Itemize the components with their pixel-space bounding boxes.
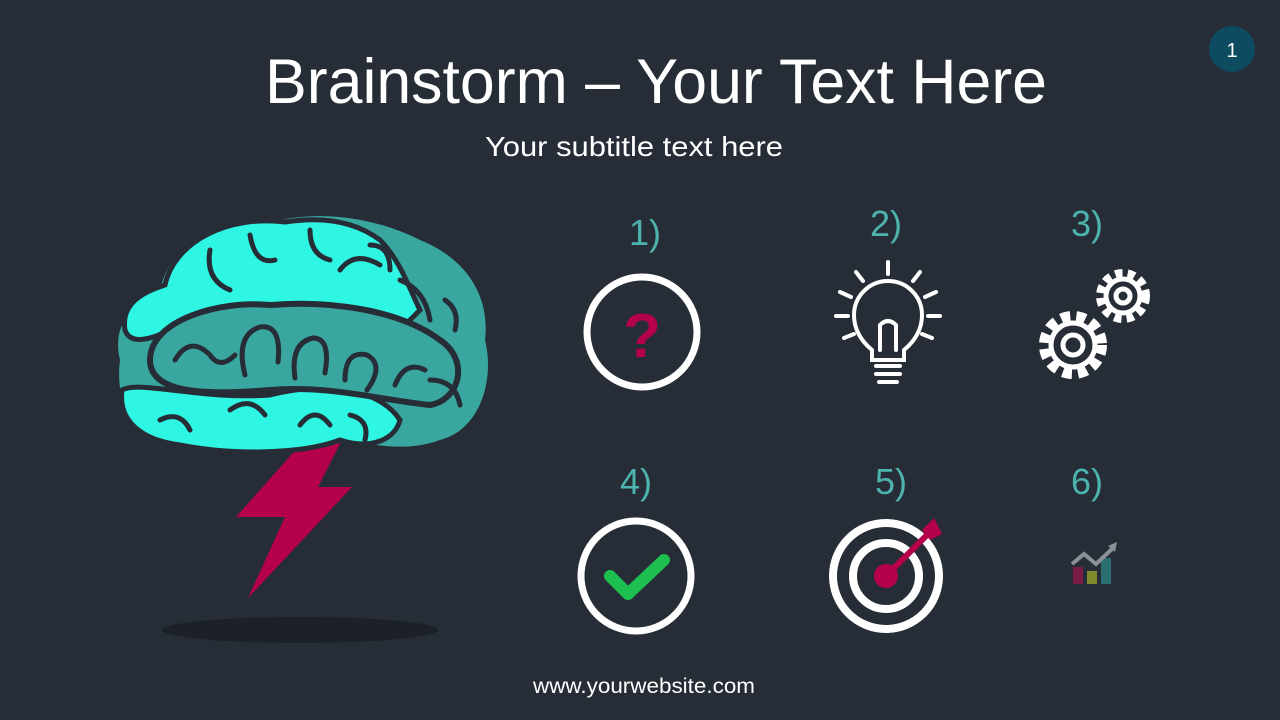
icon: chart: [1072, 542, 1117, 584]
icon: lightbulb: [836, 262, 940, 382]
numbers: 3): [1071, 203, 1103, 244]
numbers: 4): [620, 461, 652, 502]
shadow under brain: [162, 617, 438, 643]
numbers: 6): [1071, 461, 1103, 502]
page number badge: 1: [1226, 40, 1238, 62]
icon: question: [587, 277, 697, 387]
page number badge: [1209, 26, 1255, 72]
footer: www.yourwebsite.com: [532, 675, 755, 698]
title: Brainstorm – Your Text Here: [265, 47, 1047, 117]
subtitle: Your subtitle text here: [485, 131, 783, 162]
numbers: [620, 203, 1103, 502]
icon: target: [833, 518, 942, 629]
lightning bolt: [236, 420, 352, 598]
brain: [118, 216, 488, 452]
icon: check: [581, 521, 691, 631]
numbers: 5): [875, 461, 907, 502]
icon: gears: [1045, 274, 1145, 373]
numbers: 2): [870, 203, 902, 244]
icon: question: ?: [623, 302, 661, 371]
numbers: 1): [629, 212, 661, 253]
